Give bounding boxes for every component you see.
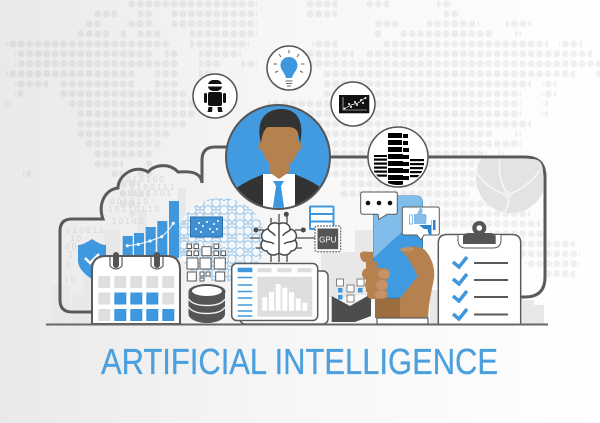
growth bar chart [123, 201, 179, 258]
binary digits in cloud: 0 1 0 0 1 1 [66, 226, 104, 235]
database stack [188, 284, 226, 323]
binary digits in cloud: 0 1 1 1 1 0 0 1 [120, 189, 172, 198]
binary digits in cloud: 0 0 1 0 1 0 [110, 197, 148, 206]
neural network mesh [177, 198, 265, 282]
icon: scatter chart [331, 82, 375, 126]
binary digits in cloud: 0 1 0 1 0 0 [126, 175, 164, 184]
binary digits in cloud: 1 [68, 250, 73, 259]
dotted world map [6, 0, 600, 279]
background city skyline [52, 188, 544, 324]
binary digits in cloud: 0 1 0 0 1 1 1 [130, 183, 175, 192]
server icon [310, 206, 334, 229]
person avatar [226, 105, 330, 215]
globe [476, 159, 543, 213]
dashboard tablet [232, 264, 328, 324]
binary digits in cloud: 1 0 [64, 275, 76, 284]
connecting frame with cloud [60, 147, 545, 312]
ground line [46, 324, 548, 326]
icon: light bulb [267, 46, 311, 90]
binary digits in cloud: 0 0 [65, 242, 77, 251]
binary digits in cloud: 1 0 1 1 0 1 1 0 [108, 205, 160, 214]
binary digits in cloud: 1 0 1 0 1 [112, 217, 144, 226]
shield icon [78, 239, 106, 279]
binary digits in cloud: 1 0 [70, 234, 82, 243]
calendar [92, 252, 180, 324]
icon: big data towers [368, 127, 428, 187]
clipboard checklist [438, 221, 521, 324]
title: ARTIFICIAL INTELLIGENCE [101, 341, 498, 382]
GPU chip: GPU [319, 236, 337, 244]
binary digits in cloud: 0 [66, 261, 71, 270]
hand holding smartphone [360, 196, 434, 324]
chat bubble [361, 192, 397, 220]
small squares cluster [187, 244, 226, 281]
binary digits in cloud [64, 175, 175, 284]
icon: robot [193, 74, 237, 118]
GPU chip [315, 226, 341, 252]
like bubble [402, 207, 439, 240]
data matrix box [190, 217, 222, 237]
small folder with squares [332, 279, 371, 322]
brain circuit [250, 212, 316, 262]
